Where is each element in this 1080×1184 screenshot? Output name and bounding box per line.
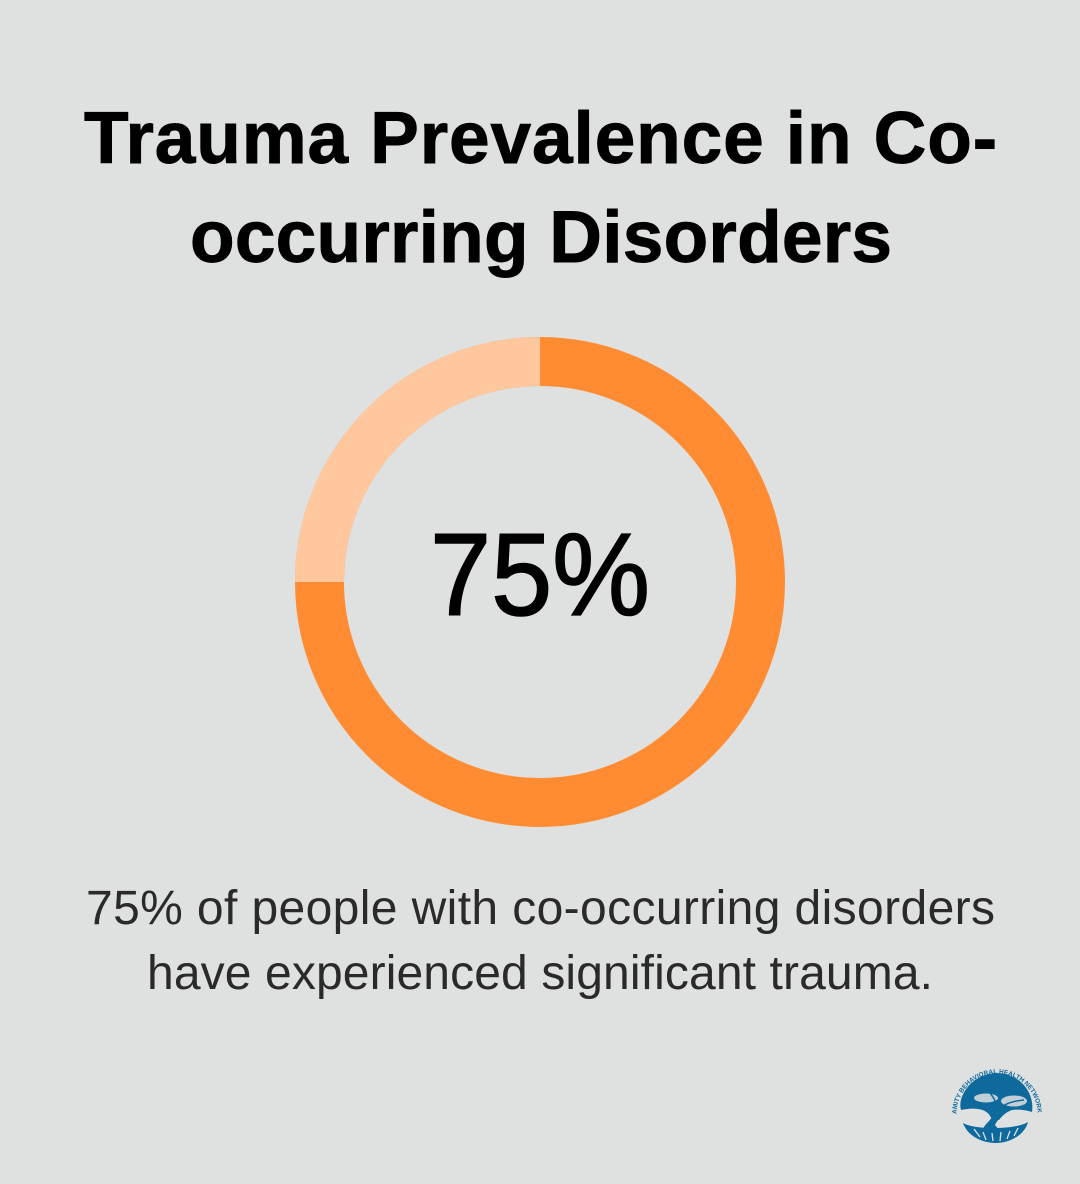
icon: Amity Behavioral Health Network logo	[952, 1069, 1042, 1143]
tree limbs	[968, 1093, 1024, 1114]
center value: 75%	[430, 509, 650, 640]
tree canopy	[960, 1073, 1032, 1120]
tree trunk	[982, 1110, 1002, 1131]
tree branches highlights	[963, 1094, 1027, 1115]
root highlights	[974, 1128, 1018, 1141]
description text: 75% of people with co-occurring disorders	[86, 882, 995, 935]
description text	[86, 882, 995, 1000]
description text: have experienced significant trauma.	[147, 947, 933, 1000]
title	[84, 98, 997, 278]
donut chart: 75 percent	[320, 362, 760, 802]
title: occurring Disorders	[190, 197, 892, 278]
icon: Amity Behavioral Health Network logo: AMITY BEHAVIORAL HEALTH NETWORK	[952, 1069, 1042, 1114]
title: Trauma Prevalence in Co-	[84, 98, 997, 179]
roots bowl	[963, 1122, 1028, 1143]
